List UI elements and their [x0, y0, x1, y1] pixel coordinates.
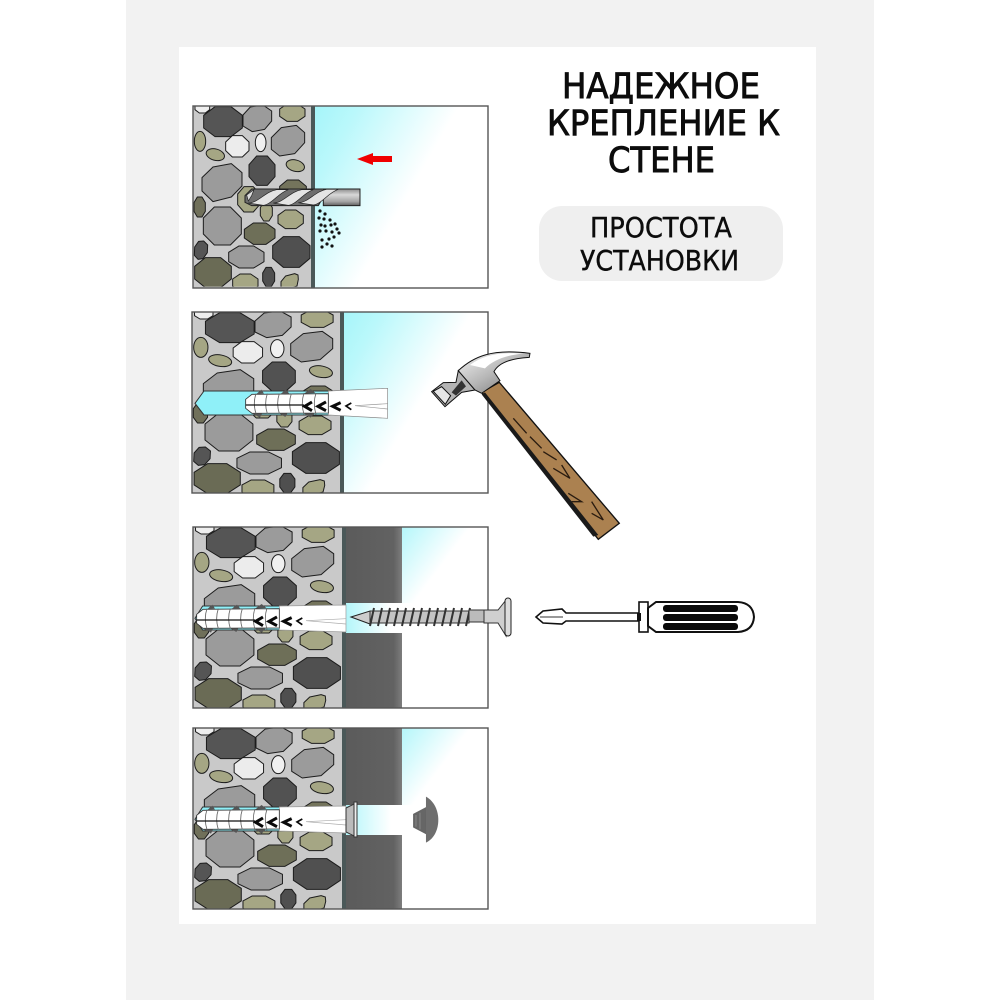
panel: step 4 finished fastening with cap [193, 723, 488, 913]
icon: screwdriver [536, 602, 754, 632]
hammer head [432, 352, 530, 407]
anchor collar [346, 802, 357, 837]
title: НАДЕЖНОЕ [562, 67, 760, 107]
icon: hammer [432, 352, 619, 539]
page background band [126, 0, 874, 1000]
icon: screw cap [413, 797, 438, 843]
icon: drill bit [245, 189, 360, 206]
stones wall step 3 [194, 522, 340, 712]
mounted board [346, 728, 402, 805]
panel: step 3 screw and workpiece [193, 522, 511, 712]
panel: step 1 drilling [193, 101, 488, 291]
screw [351, 598, 511, 636]
icon: red arrow [357, 153, 392, 165]
white sheet [179, 47, 816, 924]
anchor in drilled hole [195, 388, 388, 418]
stones wall step 2 [193, 307, 339, 497]
stones wall step 1 [194, 101, 310, 291]
badge: simple installation: ПРОСТОТА [590, 212, 732, 244]
anchor in wall step 3 [195, 604, 346, 633]
title: СТЕНЕ [608, 141, 715, 181]
panel: step 2 hammering anchor [192, 307, 488, 497]
title: КРЕПЛЕНИЕ К [547, 104, 780, 144]
anchor in wall step 4 [195, 805, 346, 834]
stones wall step 4 [194, 723, 340, 913]
hammer handle [482, 382, 619, 539]
title [547, 67, 780, 181]
badge: simple installation [539, 206, 783, 281]
mounted board [346, 527, 402, 603]
badge: simple installation: УСТАНОВКИ [580, 245, 739, 277]
dust particles [317, 209, 341, 249]
